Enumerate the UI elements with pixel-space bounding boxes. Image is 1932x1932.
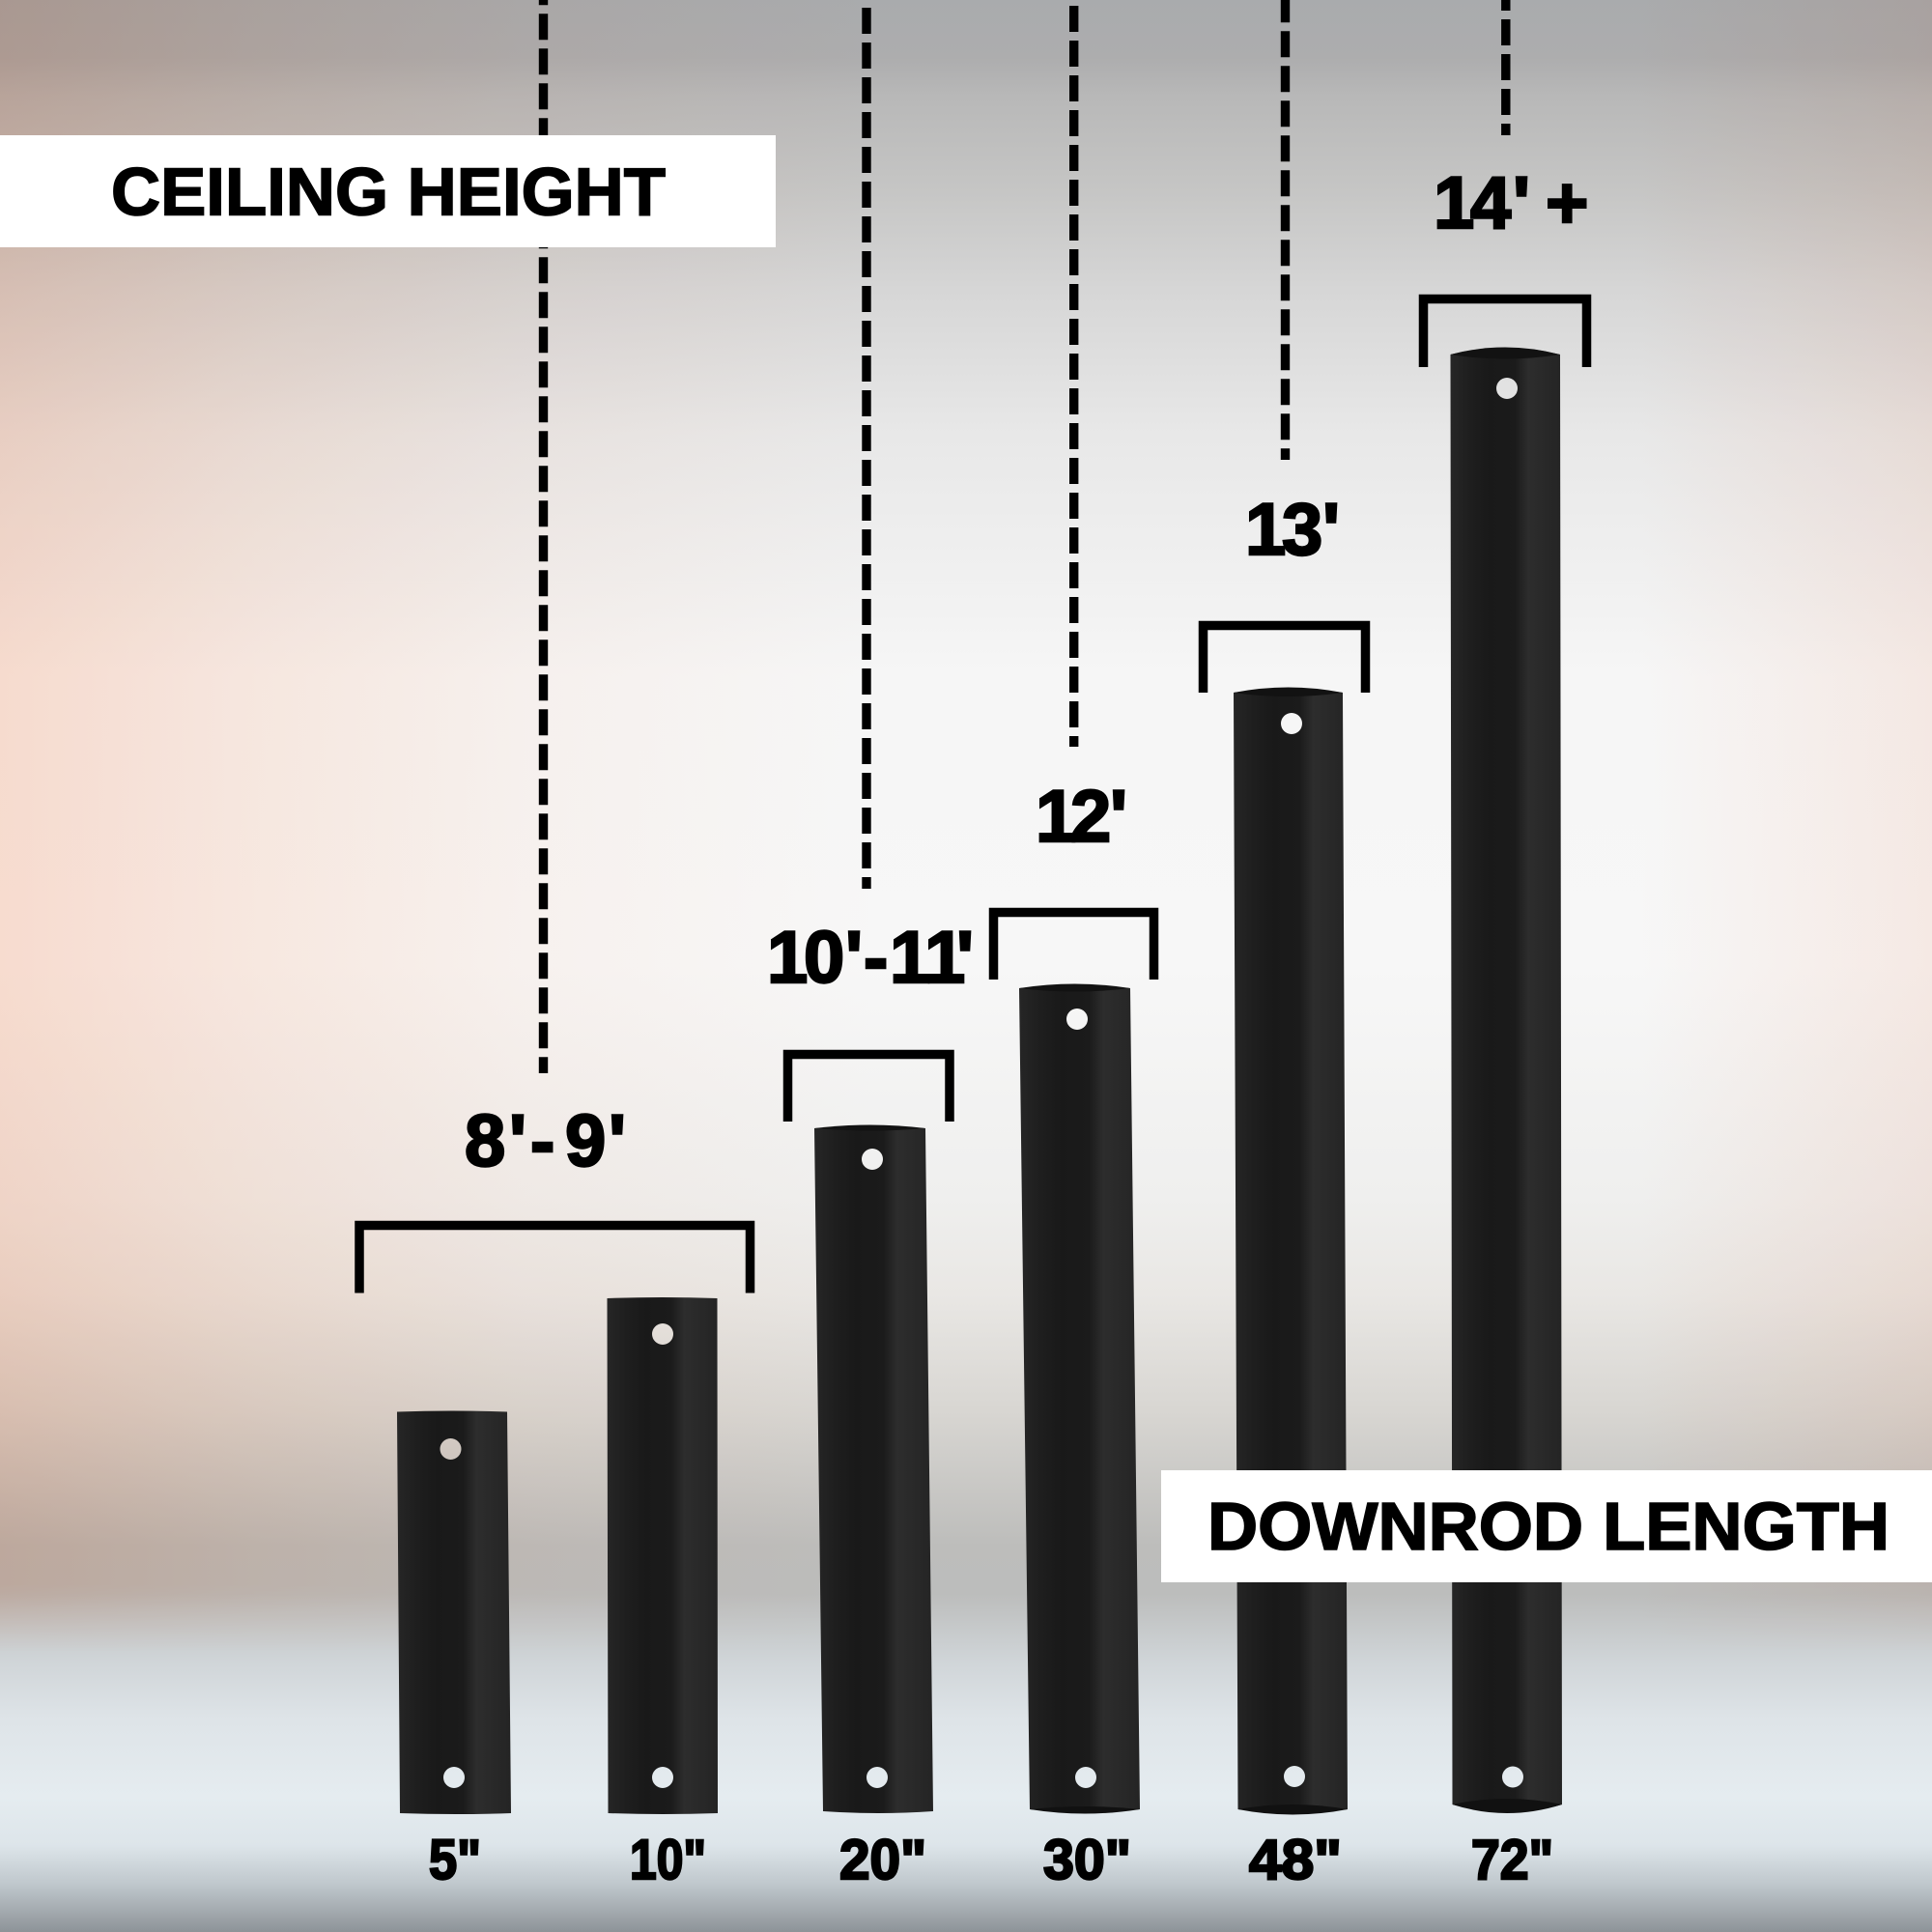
bracket: 8'-9' bbox=[359, 1225, 750, 1293]
bracket: 10'-11' bbox=[788, 1055, 950, 1122]
height label 14' +: 14' + bbox=[1434, 162, 1588, 244]
length label 48 inch: 48" bbox=[1249, 1829, 1342, 1891]
downrod length label: DOWNROD LENGTH bbox=[1208, 1489, 1889, 1564]
length label 30 inch: 30" bbox=[1043, 1829, 1131, 1891]
length label 10 inch: 10" bbox=[630, 1829, 706, 1891]
height label 13': 13' bbox=[1245, 489, 1340, 571]
rod: 48 inch bbox=[1234, 688, 1348, 1814]
bracket: 14' + bbox=[1424, 299, 1586, 367]
rod: 10 inch bbox=[607, 1297, 718, 1814]
rod: 20 inch bbox=[814, 1124, 933, 1813]
bracket: 12' bbox=[993, 912, 1153, 980]
height label 10'-11': 10'-11' bbox=[767, 917, 974, 999]
ceiling height label bbox=[0, 135, 776, 247]
rod: 5 inch bbox=[397, 1410, 511, 1814]
length label 20 inch: 20" bbox=[839, 1829, 926, 1891]
length label 5 inch: 5" bbox=[429, 1829, 481, 1891]
downrod length label bbox=[1161, 1470, 1932, 1582]
dashed line: 13' ceiling bbox=[1281, 0, 1290, 460]
ceiling height label: CEILING HEIGHT bbox=[111, 155, 666, 230]
height label 12': 12' bbox=[1036, 776, 1127, 858]
rod: 30 inch bbox=[1019, 983, 1140, 1814]
dashed line: 10'-11' ceiling bbox=[862, 8, 871, 889]
bracket: 13' bbox=[1204, 626, 1366, 693]
dashed line: 8'-9' ceiling bbox=[539, 0, 548, 1073]
dashed line: 12' ceiling bbox=[1069, 6, 1078, 747]
height label 8'-9': 8'-9' bbox=[465, 1100, 626, 1182]
rod: 72 inch bbox=[1451, 348, 1562, 1813]
length label 72 inch: 72" bbox=[1471, 1829, 1553, 1891]
dashed line: 14' + ceiling bbox=[1501, 0, 1511, 135]
